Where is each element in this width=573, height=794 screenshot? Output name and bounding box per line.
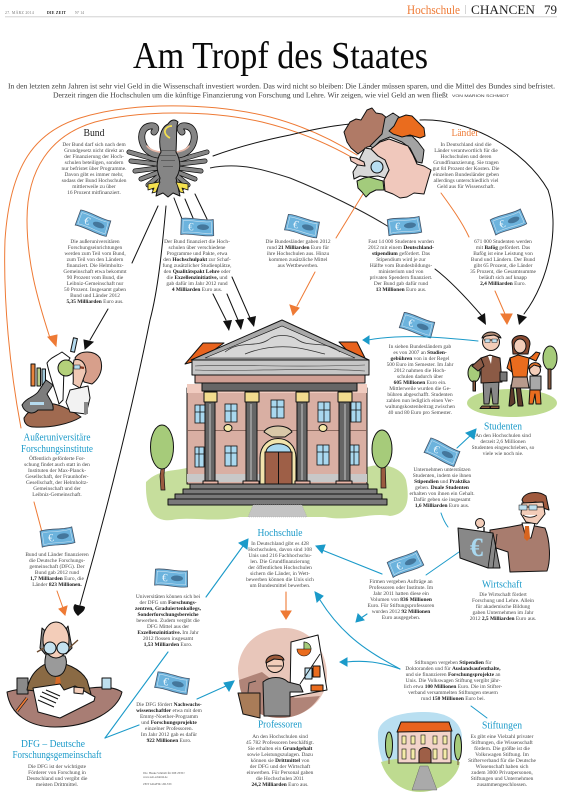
text: Länder: In Deutschland sind die: [440, 142, 492, 148]
text: Unternehmen: Dafür geben sie insgesamt: [413, 496, 471, 503]
text: Professoren: sowie Leistungszulagen. Dazu: [247, 752, 313, 758]
text: Universitäten: zentren, Graduiertenkollegs,: [135, 606, 202, 612]
building: Hochschule: [150, 320, 392, 517]
text: Deutschlandstipendium: Stipendium wird je zur: [376, 257, 426, 263]
icon: banknote Hochschulpakt: €: [188, 221, 194, 233]
text: Studenten: viele wie noch nie.: [483, 451, 523, 457]
text: Bafög: 2,4 Milliarden Euro.: [480, 281, 526, 287]
text: Bund: Der Bund darf sich nach dem: [62, 141, 126, 148]
text: außeruniversitäre funding: Bund und Länder 2012: [70, 293, 120, 299]
blue arrows: Stiftungen to Hochschule and Professoren: [315, 592, 400, 669]
text: Länder: Länder verantwortlich für die: [434, 147, 498, 154]
text: Stiftungen funding: verband versammelten Stiftungen steuern: [408, 689, 498, 696]
text: Hochschule: In Deutschland gibt es 428: [251, 541, 309, 547]
text: Hochschule: Hochschulen, davon sind 108: [248, 547, 312, 553]
icon: banknote Bundesländer: €: [292, 218, 300, 232]
text: außeruniversitäre funding: zum Teil von den Ländern: [67, 257, 124, 263]
text: Länder: allerdings unterschiedlich viel: [434, 178, 499, 184]
heading: Länder: Länder: [452, 128, 479, 139]
text: Universitäten: DFG Mittel aus der: [147, 624, 189, 630]
text: Wirtschaft: Die Wirtschaft fördert: [479, 591, 527, 598]
text: Stiftungen: zudem 3000 Privatpersonen,: [471, 770, 533, 776]
text: Bund und Länder DFG: die Deutsche Forschungs-: [29, 558, 85, 564]
heading: Professoren: Professoren: [258, 720, 303, 730]
text: Stiftungen funding: rund 150 Millionen Euro bei.: [421, 696, 485, 702]
text: Hochschule: sichern die Länder, in Wett-: [250, 571, 310, 577]
text: Bund: der Finanzierung der Hoch-: [64, 154, 124, 160]
text: Universitäten: der DFG um Forschungs-: [139, 600, 197, 606]
text: Länder: gut 84 Prozent der Kosten. Die: [433, 166, 500, 172]
arrow: Länder to Bafög: [420, 120, 553, 325]
text: Professoren: der DFG und der Wirtschaft: [250, 763, 311, 770]
text: Professoren: An den Hochschulen sind: [252, 734, 308, 740]
icon: map of Germany: [344, 108, 431, 198]
icon: banknote Universitäten: [155, 569, 188, 587]
text: Wirtschaft: Forschung und Lehre. Allein: [472, 598, 534, 604]
text: Länder: Grundfinanzierung. Sie tragen: [433, 159, 499, 166]
text: Nachwuchswissenschaftler: Emmy-Noether-Programm: [140, 714, 199, 720]
icon: banknote Bafög: €: [498, 218, 507, 231]
text: Bund Hochschulpakt: Programme und Pakte, etwa: [167, 251, 228, 257]
text: Stiftungen: Es gibt eine Vielzahl privater: [471, 734, 534, 740]
text: Wirtschaft: gaben Unternehmen im Jahr: [473, 610, 534, 616]
text: Stiftungen: Wissenschaft haben sich: [476, 763, 529, 770]
icon: banknote Nachwuchs: €: [162, 676, 170, 689]
blue arrows: DFG to Universitäten and Hochschule: [105, 539, 248, 738]
icon: banknote Studiengebühren: [399, 312, 436, 338]
text: Professoren: Sie erhalten ein Grundgehalt: [248, 746, 312, 752]
text: Forschungsinstitute: Instituten der Max-Planck-: [28, 468, 86, 474]
heading: Stiftungen: Stiftungen: [482, 720, 523, 732]
header bar: DIE ZEIT: [47, 11, 66, 15]
text: Wirtschaft: 2012 2,5 Milliarden Euro aus.: [470, 616, 536, 622]
heading: Studenten: Studenten: [484, 422, 523, 432]
text: Firmen: Jahr 2011 hatten diese ein: [373, 591, 429, 597]
blue arrow: Firmen to Hochschule: [316, 545, 382, 574]
heading: Außeruniversitäre Forschungsinstitute: Forschungsinstitute: [21, 444, 93, 455]
text: Länder: Hochschulen und deren: [441, 154, 492, 160]
orange line to banknote DFG: [34, 502, 42, 532]
text: Studiengebühren: Mittlerweile wurden die Ge-: [389, 386, 451, 392]
text: Bafög: gibt 65 Prozent, die Länder: [474, 263, 533, 269]
header bar: 79: [544, 3, 557, 17]
text: Deutschlandstipendium: ministerium und von: [379, 269, 424, 275]
icon: banknote Forschung: €: [82, 215, 92, 228]
intro text: In den letzten zehn Jahren ist sehr viel Geld in die Wissenschaft investiert worden. Das wird nicht so bleiben: Die Länder müssen sparen, und die Mittel des Bundes sind befristet.: [8, 84, 555, 90]
text: Stiftungen: Volkswagen Stiftung. Im: [475, 751, 530, 758]
heading: Außeruniversitäre Forschungsinstitute: [21, 432, 93, 455]
text: Studiengebühren: schulen dadurch über: [397, 374, 443, 380]
header bar: CHANCEN: [471, 3, 535, 17]
text: Firmen: Firmen vergeben Aufträge an: [369, 578, 433, 585]
icon: banknote Unternehmen: [424, 437, 461, 467]
text: Stiftungen funding: und sie finanzieren Forschungsprojekte an: [406, 672, 500, 678]
icon: banknote Unternehmen: €: [431, 443, 442, 457]
columns: [203, 392, 352, 485]
text: DFG: meisten Drittmittel.: [36, 782, 78, 788]
arrow: Bund to DFG: [73, 206, 166, 616]
text: Stiftungen: zusammengeschlossen.: [477, 782, 527, 788]
text: Studiengebühren: 500 Euro im Semester. Im Jahr: [387, 362, 454, 368]
text: Bund: mittlerweile zu über: [72, 184, 116, 190]
text: DFG: Deutschland und vergibt die: [27, 776, 88, 782]
text: Bund: 16 Prozent mitfinanziert.: [67, 189, 121, 196]
icon: banknote Deutschlandstipendium: €: [394, 221, 402, 233]
blue arrow to Professoren: [197, 681, 234, 699]
text: Studiengebühren: waltungskostenbeitrag zwischen: [385, 404, 455, 410]
door: [260, 426, 296, 484]
text: Professoren: die Hochschulen 2011: [256, 776, 304, 782]
text: außeruniversitäre funding: 90 Prozent vom Bund, die: [67, 275, 124, 281]
walls: [187, 388, 367, 484]
text: Bund: nur befristet über Programme.: [62, 165, 126, 172]
text: Forschungsinstitute: Leibniz-Gemeinschaft.: [32, 491, 82, 498]
intro text: Derzeit ringen die Hochschulen um die künftige Finanzierung von Forschung und Lehre. Wir zeigen, wie viel Geld an wen fließt: [53, 92, 448, 100]
text: Bund Hochschulpakt: gab dafür im Jahr 2012 rund: [166, 280, 228, 287]
title: Am Tropf des Staates: [133, 35, 428, 77]
text: Bund Hochschulpakt: die Exzellenzinitiative, und: [167, 275, 227, 281]
text: Stiftungen funding: Doktoranden und für Auslandsaufenthalte,: [405, 666, 501, 672]
text: credits: ZEIT GRAFIK: 26LSTC: [143, 782, 172, 786]
text: außeruniversitäre funding: Gemeinschaft etwa bekommt: [63, 268, 127, 275]
blue arrow: Firmen to Professoren: [356, 614, 367, 622]
text: Universitäten: 2012 flossen insgesamt: [143, 635, 194, 642]
text: Bafög: beläuft sich auf knapp: [479, 274, 527, 281]
text: außeruniversitäre funding: finanziert. Die Helmholtz-: [66, 262, 124, 269]
text: Bund: Davon gibt es immer mehr,: [65, 172, 124, 178]
ornaments: [224, 424, 327, 432]
blue arrow: Studenten to Hochschule: [363, 336, 478, 344]
heading: Hochschule: Hochschule: [258, 528, 303, 539]
text: DFG: Förderer von Forschung in: [28, 770, 86, 776]
text: Hochschule: len. Die Grundfinanzierung: [250, 558, 310, 565]
icon: banknote DFG: €: [47, 532, 55, 545]
arrow: Deutschlandstipendium to Studenten: [435, 269, 486, 325]
text: außeruniversitäre funding: Leibniz-Gemeinschaft nur: [67, 280, 124, 287]
text: Nachwuchswissenschaftler: 922 Millionen Euro.: [147, 738, 191, 744]
text: Stiftungen funding: lich etwa 100 Millionen Euro. Die im Stifter-: [404, 684, 502, 690]
steps: [168, 484, 387, 505]
heading: Außeruniversitäre Forschungsinstitute: Außeruniversitäre: [24, 432, 91, 444]
text: Bund Hochschulpakt: den Qualitätspakt Lehre oder: [164, 269, 230, 275]
header bar: [5, 3, 557, 17]
text: Studiengebühren: bühren abgeschafft. Studenten: [387, 391, 453, 398]
orange arrow: Hochschule to Professoren: [281, 592, 291, 619]
text: credits: Ills.: Hauke Schmidt für DIE ZEIT//: [143, 771, 185, 775]
arrows: Bund to Hochschulpakt note and Hochschule: [174, 194, 256, 331]
text: Studiengebühren: 40 und 80 Euro pro Semester.: [388, 410, 452, 416]
text: Unternehmen: 1,6 Milliarden Euro aus.: [415, 503, 469, 509]
text: Forschungsinstitute: schung findet auch statt in den: [24, 461, 90, 468]
text: Länder: einzelnen Bundesländer geben: [433, 172, 499, 178]
text: Universitäten: Universitäten können sich bei: [136, 594, 201, 600]
text: DFG: Die DFG ist der wichtigste: [28, 764, 87, 770]
path: [248, 505, 307, 517]
text: Bund: Grundgesetz nicht direkt an: [64, 148, 124, 154]
text: Hochschule: der öffentlichen Hochschulen: [248, 564, 312, 571]
text: Unternehmen: Studenten, indem sie ihnen: [413, 473, 471, 479]
icon: banknote Hochschulpakt: [181, 218, 214, 236]
icon: banknote Firmen: €: [395, 560, 405, 573]
text: Bundesländer: Die Bundesländer gaben 2012: [265, 239, 331, 245]
text: Bundesländer: ihre Hochschulen aus. Hinzu: [267, 251, 329, 257]
text: Deutschlandstipendium: Fast 14 000 Studenten wurden: [368, 239, 434, 245]
intro text: VON MARION SCHMIDT: [452, 94, 510, 98]
text: Studenten: derzeit 2,6 Millionen: [480, 439, 526, 445]
header bar: Hochschule: [407, 3, 460, 17]
tree left: [150, 425, 174, 490]
text: Unternehmen: Unternehmen unterstützen: [413, 467, 471, 473]
text: Stiftungen funding: Unis. Die Volkswagen Stiftung vergibt jähr-: [406, 677, 501, 684]
text: credits: www.zeit-schmidt.de: [143, 775, 168, 779]
text: außeruniversitäre funding: Die außeruniversitären: [70, 238, 120, 245]
text: Stiftungen: Stiftungen, die Wissenschaft: [471, 739, 533, 746]
text: Bund und Länder DFG: Bund und Länder finanzieren: [25, 551, 89, 558]
text: Deutschlandstipendium: Der Bund gab dafür rund: [374, 280, 428, 287]
text: Hochschule: Unis und 216 Fachhochschu-: [248, 553, 312, 559]
text: Bafög: Bafög ist eine Leistung von: [473, 250, 533, 257]
text: Nachwuchswissenschaftler: und Forschungsprojekte: [141, 720, 197, 726]
text: Studiengebühren: 605 Millionen Euro ein.: [394, 380, 446, 386]
tree right: [372, 430, 392, 488]
text: Bund und Länder DFG: gemeinschaft (DFG). Der: [29, 563, 85, 570]
text: Universitäten: Exzellenzinitiative. Im Jahr: [137, 630, 199, 636]
text: Professoren: können sie Drittmittel von: [251, 758, 309, 764]
text: Wirtschaft: für akademische Bildung: [476, 603, 530, 610]
illustration: foundation villa: [378, 712, 462, 792]
lines: Bund to Länder and Deutschlandstipendium: [210, 124, 389, 227]
text: credits: [143, 771, 185, 786]
text: Forschungsinstitute: Gesellschaft, der Helmholtz-: [26, 479, 88, 486]
text: Bund: schulen beteiligen, sondern: [65, 160, 124, 166]
wall bands: [187, 384, 367, 482]
intro text: [8, 84, 555, 100]
text: Hochschule: bewerben können die Unis sich: [246, 577, 314, 583]
text: Forschungsinstitute: Öffentlich geförderte For-: [29, 455, 85, 462]
text: Universitäten: Sonderforschungsbereiche: [138, 612, 199, 618]
text: Firmen: Volumen von 836 Millionen: [370, 597, 432, 603]
text: Bund und Länder DFG: 1,7 Milliarden Euro, die: [30, 576, 84, 582]
text: außeruniversitäre funding: 50 Prozent. Insgesamt gaben: [64, 287, 126, 293]
blue line from Stiftungen: [471, 706, 487, 718]
text: Bundesländer: rund 21 Milliarden Euro für: [267, 245, 329, 251]
text: Bafög: mit Bafög gefördert. Das: [476, 245, 530, 251]
text: Studenten: Studenten eingeschrieben, so: [472, 445, 535, 451]
icon: federal eagle: [129, 120, 207, 197]
text: außeruniversitäre funding: 5,35 Milliarden Euro aus.: [66, 299, 124, 305]
text: Bundesländer: kommen zusätzliche Mittel: [269, 257, 328, 263]
text: Stiftungen: Stiftungen und Unternehmen: [471, 775, 534, 782]
text: Bund Hochschulpakt: den Hochschulpakt zur Schaf-: [163, 257, 231, 263]
blue arrow to Studenten: [457, 429, 476, 448]
text: Bafög: 35 Prozent, die Gesamtsumme: [470, 269, 537, 275]
heading: Bund: Bund: [84, 128, 105, 139]
text: Bund Hochschulpakt: fung zusätzlicher Studienplätze,: [162, 262, 232, 269]
icon: banknote Forschung: [75, 209, 112, 237]
orange arrow to DFG: [57, 591, 67, 615]
text: außeruniversitäre funding: werden zum Teil vom Bund,: [64, 251, 126, 257]
text: Deutschlandstipendium: stipendium gefördert. Das: [372, 251, 430, 257]
text: Firmen: Professoren oder Institute. Im: [369, 584, 434, 591]
text: Forschungsinstitute: Gesellschaft, der Fraunhofer-: [25, 473, 89, 480]
text: Firmen: Euro ausgegeben.: [382, 615, 420, 621]
icon: banknote Bundesländer: [284, 214, 321, 238]
heading: DFG: Forschungsgemeinschaft: [12, 750, 102, 761]
text: außeruniversitäre funding: Forschungseinrichtungen: [68, 245, 123, 251]
text: Studiengebühren: gebühren von in der Regel: [391, 356, 449, 362]
text: Bund Hochschulpakt: Der Bund finanziert die Hoch-: [164, 238, 230, 245]
roof corners: [185, 342, 365, 364]
icon: banknote Deutschlandstipendium: [387, 216, 422, 236]
heading: DFG: [12, 739, 102, 761]
text: Bund Hochschulpakt: 4 Milliarden Euro aus.: [172, 287, 222, 293]
icon: banknote Nachwuchs: [155, 671, 190, 695]
text: Professoren: einwerben. Für Personal gaben: [247, 770, 314, 776]
arrow: Bund to research institutes: [84, 206, 158, 349]
illustration: scientist: [22, 338, 102, 427]
text: Studiengebühren: In sieben Bundesländern gab: [389, 344, 452, 350]
text: Deutschlandstipendium: privaten Spendern finanziert.: [370, 274, 432, 281]
text: Bund Hochschulpakt: schulen über verschiedene: [169, 245, 226, 251]
text: Studiengebühren: zahlen nun lediglich einen Ver-: [386, 398, 454, 404]
text: Deutschlandstipendium: Hälfte vom Bundesbildungs-: [370, 262, 432, 269]
text: Bund und Länder DFG: Länder 823 Millionen.: [32, 582, 82, 588]
text: Unternehmen: erhalten von ihnen ein Gehalt.: [409, 491, 475, 497]
icon: banknote Bafög: [490, 208, 527, 236]
text: Professoren: 45 782 Professoren beschäftigt.: [246, 739, 314, 746]
icon: banknote Universitäten: €: [162, 572, 168, 584]
heading: Wirtschaft: Wirtschaft: [482, 580, 522, 590]
text: Universitäten: 1,53 Milliarden Euro.: [144, 642, 192, 648]
orange arrows from Länder: [290, 193, 512, 324]
text: Studiengebühren: 2012 nahmen die Hoch-: [394, 368, 446, 374]
text: Forschungsinstitute: Gemeinschaft und der: [33, 485, 81, 492]
entablature: [192, 360, 369, 391]
text: Studenten: An den Hochschulen sind: [475, 433, 531, 439]
lawn: [146, 465, 408, 520]
text: Universitäten: bewerben. Zudem vergibt die: [136, 618, 200, 624]
text: Bundesländer: aus Wettbewerben.: [278, 263, 318, 269]
text: Bafög: Bund und Ländern. Der Bund: [471, 257, 535, 263]
text: Nachwuchswissenschaftler: einzelner Professoren.: [145, 725, 193, 732]
text: Länder: Geld aus für Wissenschaft.: [437, 183, 495, 190]
illustration: DFG professor: [7, 622, 122, 727]
text: Professoren: 24,2 Milliarden Euro aus.: [251, 782, 309, 788]
text: Bund: sodass der Bund Hochschulen: [62, 178, 127, 184]
windows: [195, 400, 361, 467]
text: Nachwuchswissenschaftler: wissenschaftler etwa mit dem: [136, 708, 202, 714]
orange arcs: Länder to research institutes: [5, 106, 357, 428]
text: Deutschlandstipendium: 13 Millionen Euro aus.: [376, 287, 426, 293]
text: Unternehmen: geben. Duale Studenten: [415, 485, 469, 491]
text: Hochschule: um Bundesmittel bewerben.: [250, 583, 310, 589]
illustration: businessman with briefcase: €: [470, 533, 483, 562]
text: Stiftungen: Stifterverband für die Deutsche: [468, 757, 537, 764]
icon: banknote DFG: [40, 526, 75, 548]
text: Unternehmen: Stipendien und Praktika: [414, 479, 470, 485]
illustration: businessman with briefcase: [458, 493, 549, 572]
text: Bund und Länder DFG: Bund gab 2012 rund: [35, 570, 79, 576]
text: Firmen: Euro. Für Stiftungsprofessoren: [368, 602, 435, 609]
illustration: students: [467, 332, 557, 417]
text: Stiftungen funding: Stiftungen vergeben Stipendien für: [414, 660, 492, 666]
heading: DFG: DFG – Deutsche: [21, 739, 85, 750]
header bar: 27. MÄRZ 2014: [5, 10, 34, 15]
text: Firmen: wurden 2012 92 Millionen: [372, 609, 430, 615]
header bar: N° 14: [75, 11, 84, 15]
icon: banknote Studiengebühren: €: [406, 317, 416, 330]
text: Nachwuchswissenschaftler: Im Jahr 2012 gab es dafür: [141, 731, 197, 738]
illustration: professor: [238, 628, 327, 718]
blue arcs from Wirtschaft: [426, 513, 459, 575]
text: Deutschlandstipendium: 2012 mit einem Deutschland-: [368, 245, 434, 251]
icon: banknote Firmen: [387, 550, 424, 578]
text: Stiftungen: fördern. Die größte ist die: [474, 745, 531, 752]
pediment: [191, 320, 369, 360]
text: Studiengebühren: es von 2007 an Studien-: [393, 350, 447, 356]
text: Bafög: 671 000 Studenten werden: [474, 239, 532, 245]
text: Nachwuchswissenschaftler: Die DFG fördert Nachwuchs-: [136, 702, 202, 708]
